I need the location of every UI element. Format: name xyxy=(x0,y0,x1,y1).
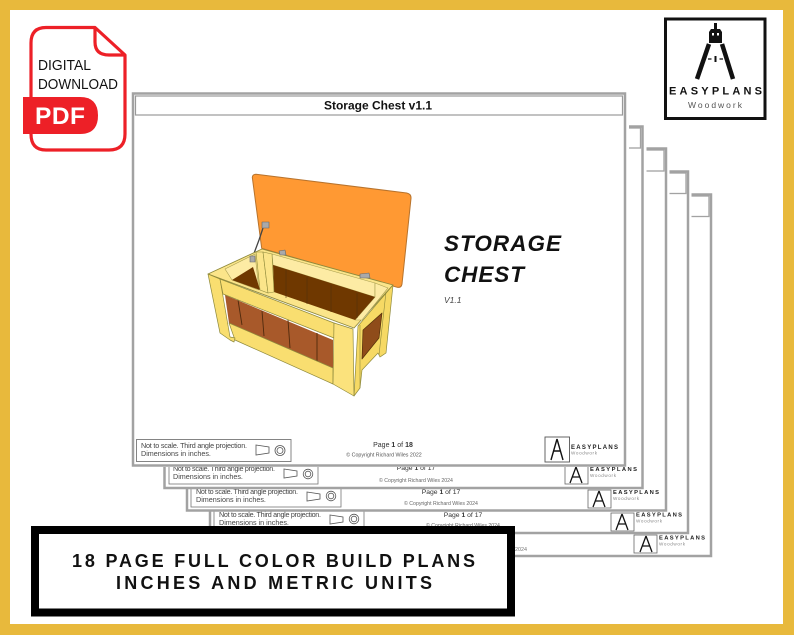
lid stay xyxy=(253,222,269,256)
cover title: CHEST xyxy=(444,262,526,287)
brand logo: Easyplans Woodwork xyxy=(666,19,765,118)
plan sheet 3: EASYPLANS xyxy=(613,490,659,496)
page number and copyright xyxy=(346,442,422,458)
cover title xyxy=(444,231,562,305)
footer logo: Woodwork xyxy=(571,450,598,456)
projection note: Dimensions in inches. xyxy=(141,449,211,458)
plan sheet 4: Woodwork xyxy=(636,518,663,524)
projection note: Not to scale. Third angle projection. xyxy=(141,441,247,450)
side frame xyxy=(354,285,393,396)
plan sheet 2: Not to scale. Third angle projection. xyxy=(173,464,275,473)
plan sheet 3: Not to scale. Third angle projection. xyxy=(196,487,298,496)
inner yellow walls xyxy=(225,254,388,320)
caption box: INCHES AND METRIC UNITS xyxy=(116,573,432,593)
plan sheet 2: Page 1 of 17 xyxy=(397,465,435,472)
plan sheet 5 (rearmost) xyxy=(233,194,711,556)
footer logo xyxy=(545,437,618,462)
plan sheet 2: © Copyright Richard Wiles 2024 xyxy=(379,477,453,484)
plan sheet 4: © Copyright Richard Wiles 2024 xyxy=(426,522,500,529)
download label: DIGITAL xyxy=(38,57,91,74)
caption box xyxy=(35,530,511,612)
brand logo: Easyplans Woodwork: Woodwork xyxy=(688,100,743,110)
PDF badge: PDF xyxy=(35,103,85,130)
plan sheet 2: EASYPLANS xyxy=(590,467,637,473)
front frame and panels xyxy=(208,274,354,396)
plan sheet 4: EASYPLANS xyxy=(636,512,682,518)
caption box: 18 PAGE FULL COLOR BUILD PLANS xyxy=(72,551,475,571)
plan sheet 5 (rearmost): EASYPLANS xyxy=(659,536,705,542)
illustration: open storage chest xyxy=(208,174,411,396)
plan sheet 4: Not to scale. Third angle projection. xyxy=(219,510,321,519)
plan sheet 4 xyxy=(207,168,692,534)
centre posts xyxy=(256,252,274,293)
page number and copyright: Page 1 of 18 xyxy=(373,442,413,449)
chest rim xyxy=(208,249,393,328)
brand logo: Easyplans Woodwork: EASYPLANS xyxy=(669,86,762,98)
cover title: STORAGE xyxy=(444,231,562,256)
sheet title bar xyxy=(136,96,622,115)
chest interior xyxy=(232,265,375,320)
projection note xyxy=(136,440,291,462)
footer logo: EASYPLANS xyxy=(571,445,618,451)
plan sheet 4: Dimensions in inches. xyxy=(219,518,289,527)
icon: drafting compass xyxy=(697,23,733,79)
plan sheet 3: Dimensions in inches. xyxy=(196,495,266,504)
plan sheet 3 xyxy=(184,145,670,511)
plan sheet 3: Page 1 of 17 xyxy=(422,489,460,496)
plan sheet 3: © Copyright Richard Wiles 2024 xyxy=(404,500,478,507)
download label: DOWNLOAD xyxy=(38,76,118,93)
plan sheet 5 (rearmost): Woodwork xyxy=(659,542,686,546)
cover title: V1.1 xyxy=(444,295,462,305)
main plan sheet: storage chest cover xyxy=(129,90,629,467)
chest lid xyxy=(252,174,411,287)
plan sheet 2 xyxy=(161,123,646,489)
hinges xyxy=(250,250,370,278)
plan sheet 2: Dimensions in inches. xyxy=(173,472,243,481)
plan sheet 5 (rearmost): 2024 xyxy=(515,547,527,553)
plan sheet 3: Woodwork xyxy=(613,496,640,501)
plan sheet 4: Page 1 of 17 xyxy=(444,512,482,519)
icon: digital download PDF file xyxy=(23,28,125,150)
plan sheet 2: Woodwork xyxy=(590,473,617,478)
download label xyxy=(38,57,118,93)
sheet title bar: Storage Chest v1.1 xyxy=(324,98,432,112)
page number and copyright: © Copyright Richard Wiles 2022 xyxy=(346,452,422,458)
page fold xyxy=(95,28,125,55)
